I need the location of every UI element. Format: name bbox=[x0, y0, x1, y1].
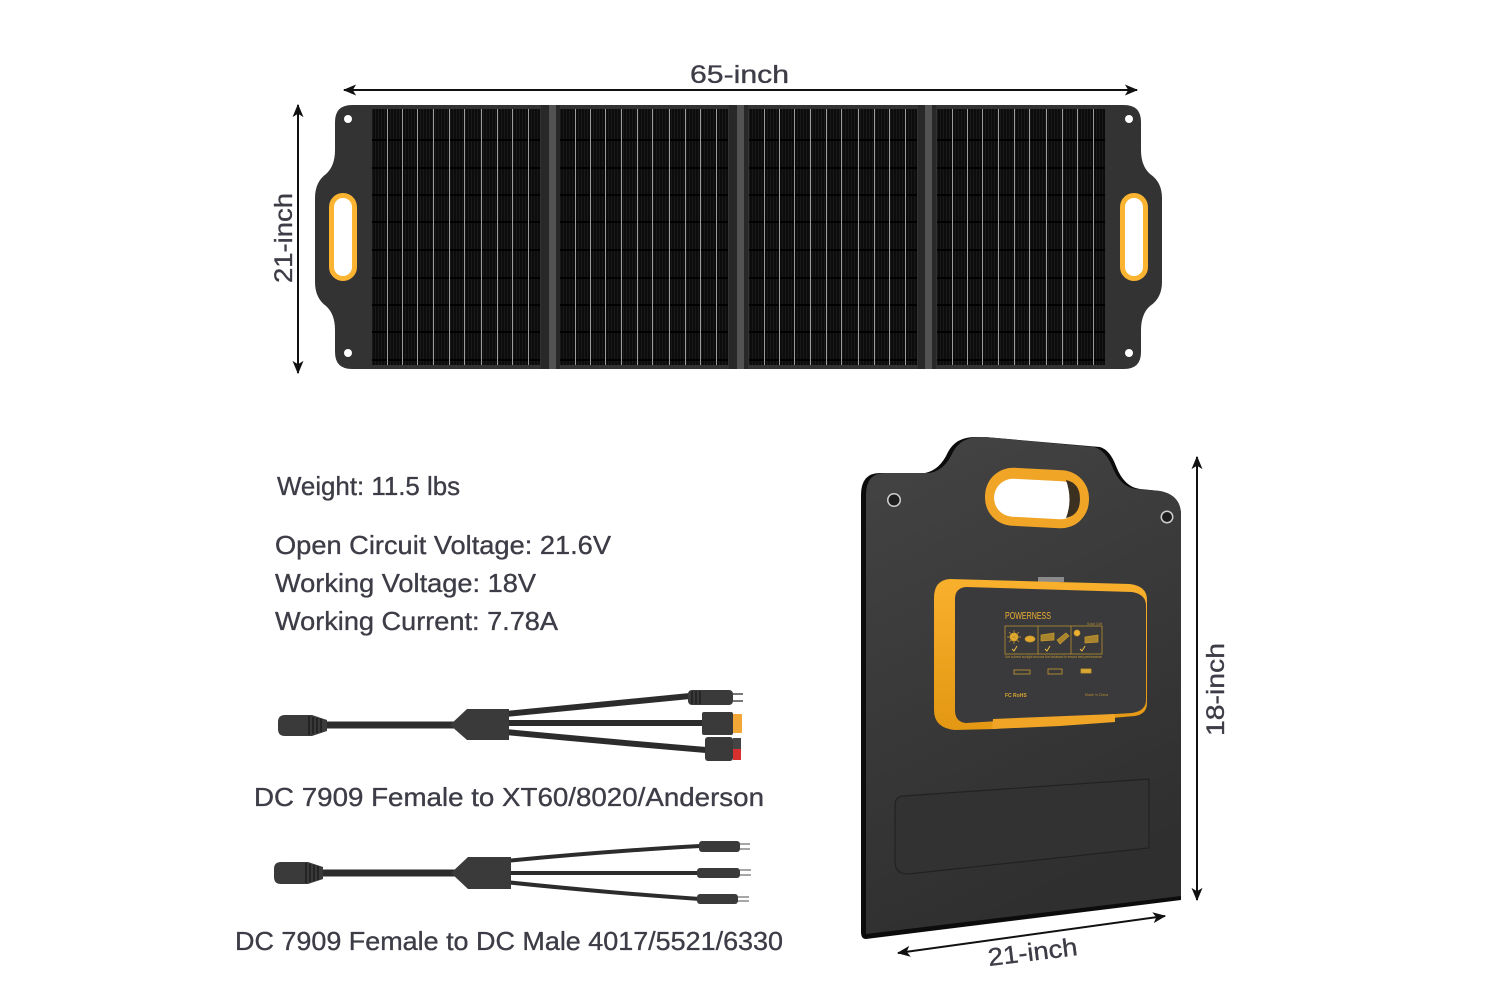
front clip bbox=[992, 714, 1115, 729]
junction box bbox=[934, 577, 1147, 730]
label: 65-inch: 65-inch bbox=[690, 61, 789, 89]
orange case bbox=[934, 579, 1147, 730]
port icons bbox=[1014, 669, 1091, 674]
solar cells bbox=[372, 109, 1105, 365]
grommets bbox=[887, 493, 1174, 524]
label: 21-inch width: 21-inch bbox=[986, 933, 1079, 972]
instruction line: Get a direct sunlight and use the kickstand to ensure best performance bbox=[1005, 655, 1102, 659]
splitter hub bbox=[450, 709, 509, 740]
grommets bbox=[344, 115, 1133, 357]
panel: folded solar panel back bbox=[861, 437, 1181, 939]
cable: DC male 4017/5521/6330 adapter bbox=[274, 841, 751, 904]
certification mark: FC RoHS bbox=[1005, 693, 1027, 699]
arrow: 21-inch width bbox=[898, 916, 1165, 953]
arrow: 21-inch height bbox=[297, 105, 299, 373]
caption: first cable: DC 7909 Female to XT60/8020/Anderson bbox=[254, 782, 764, 812]
arrow: 65-inch width bbox=[344, 89, 1137, 91]
back panel edge bbox=[861, 437, 1181, 939]
spec: working voltage: Working Voltage: 18V bbox=[275, 568, 537, 598]
handle: right bbox=[1122, 196, 1146, 278]
connector: 5521 bbox=[697, 868, 751, 878]
connector: 6330 bbox=[697, 894, 749, 904]
connector: DC 7909 female bbox=[274, 862, 323, 884]
spec: open circuit voltage: Open Circuit Voltage: 21.6V bbox=[275, 530, 612, 560]
latch bbox=[1038, 577, 1064, 582]
dark lid bbox=[955, 587, 1146, 723]
connector: XT60 bbox=[702, 712, 742, 735]
fold strips bbox=[541, 105, 936, 369]
spec: working current: Working Current: 7.78A bbox=[275, 606, 559, 636]
specifications text bbox=[275, 471, 612, 636]
handle bbox=[984, 466, 1090, 530]
storage pocket bbox=[895, 779, 1149, 874]
arrow: 18-inch height bbox=[1196, 457, 1198, 900]
splitter hub bbox=[451, 857, 511, 889]
panel: unfolded solar panel front bbox=[315, 105, 1162, 369]
handle: left bbox=[332, 196, 354, 278]
connector: DC 7909 female bbox=[278, 715, 327, 736]
back panel face bbox=[866, 437, 1181, 934]
label: 18-inch: 18-inch bbox=[1202, 643, 1230, 736]
cable: XT60/8020/Anderson adapter bbox=[278, 690, 743, 761]
panel body bbox=[315, 105, 1162, 369]
connector: 4017 bbox=[699, 841, 750, 852]
spec: weight: Weight: 11.5 lbs bbox=[277, 471, 460, 501]
caption: second cable: DC 7909 Female to DC Male 4017/5521/6330 bbox=[235, 926, 783, 956]
connector: Anderson bbox=[705, 737, 741, 761]
label: 21-inch height: 21-inch bbox=[270, 193, 298, 283]
pictogram table bbox=[1005, 626, 1102, 654]
brand: POWERNESS: POWERNESS bbox=[1005, 611, 1051, 622]
model label: Solar Cell bbox=[1087, 622, 1102, 626]
connector: 8020 bbox=[688, 690, 743, 705]
made in china: Made in China bbox=[1085, 693, 1108, 697]
